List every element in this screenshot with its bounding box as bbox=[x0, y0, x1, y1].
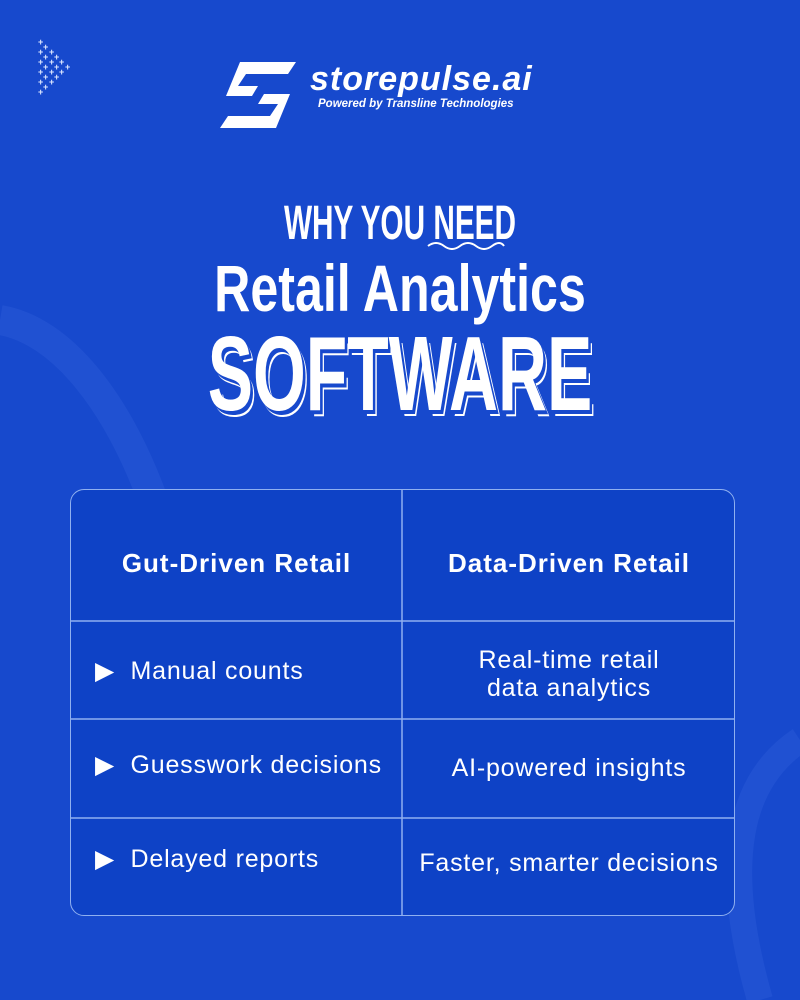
icon: dotted arrow: + bbox=[65, 62, 70, 72]
icon: dotted arrow: + bbox=[38, 57, 43, 67]
row 1 right bbox=[479, 646, 659, 702]
brand name: storepulse.ai bbox=[310, 60, 533, 98]
icon: dotted arrow: + bbox=[43, 62, 48, 72]
icon: dotted arrow: + bbox=[54, 62, 59, 72]
row 1 right: Real-time retail bbox=[479, 646, 659, 674]
icon: dotted arrow: + bbox=[49, 67, 54, 77]
icon: dotted arrow: + bbox=[38, 87, 43, 97]
title bbox=[208, 197, 594, 433]
icon: dotted arrow: + bbox=[59, 67, 64, 77]
logo bbox=[220, 60, 533, 128]
header: gut-driven: Gut-Driven Retail bbox=[122, 548, 351, 578]
icon: dotted arrow: + bbox=[43, 42, 48, 52]
title: SOFTWARE bbox=[208, 315, 592, 433]
row 2 right: AI-powered insights bbox=[452, 754, 686, 782]
title: WHY YOU NEED bbox=[284, 197, 516, 250]
icon: dotted arrow: + bbox=[43, 52, 48, 62]
icon: dotted arrow: + bbox=[43, 72, 48, 82]
icon: dotted arrow: + bbox=[54, 52, 59, 62]
icon: dotted arrow bbox=[38, 37, 70, 97]
icon: dotted arrow: + bbox=[38, 67, 43, 77]
row 2 left: ▶ Guesswork decisions bbox=[95, 750, 382, 778]
icon: logo mark bbox=[220, 62, 296, 128]
icon: dotted arrow: + bbox=[54, 72, 59, 82]
squiggle bbox=[428, 242, 505, 250]
row 1 left: ▶ Manual counts bbox=[95, 657, 304, 685]
icon: dotted arrow: + bbox=[49, 77, 54, 87]
icon: dotted arrow: + bbox=[38, 37, 43, 47]
row 3 right: Faster, smarter decisions bbox=[419, 848, 719, 876]
icon: dotted arrow: + bbox=[49, 57, 54, 67]
comparison table bbox=[70, 489, 735, 916]
tagline: Powered by Transline Technologies bbox=[318, 98, 514, 110]
header: data-driven: Data-Driven Retail bbox=[448, 548, 690, 578]
icon: dotted arrow: + bbox=[38, 47, 43, 57]
icon: dotted arrow: + bbox=[49, 47, 54, 57]
icon: dotted arrow: + bbox=[38, 77, 43, 87]
icon: dotted arrow: + bbox=[43, 82, 48, 92]
row 1 right: data analytics bbox=[487, 674, 651, 702]
row 3 left: ▶ Delayed reports bbox=[95, 844, 319, 872]
title: Retail Analytics bbox=[214, 251, 586, 325]
icon: dotted arrow: + bbox=[59, 57, 64, 67]
